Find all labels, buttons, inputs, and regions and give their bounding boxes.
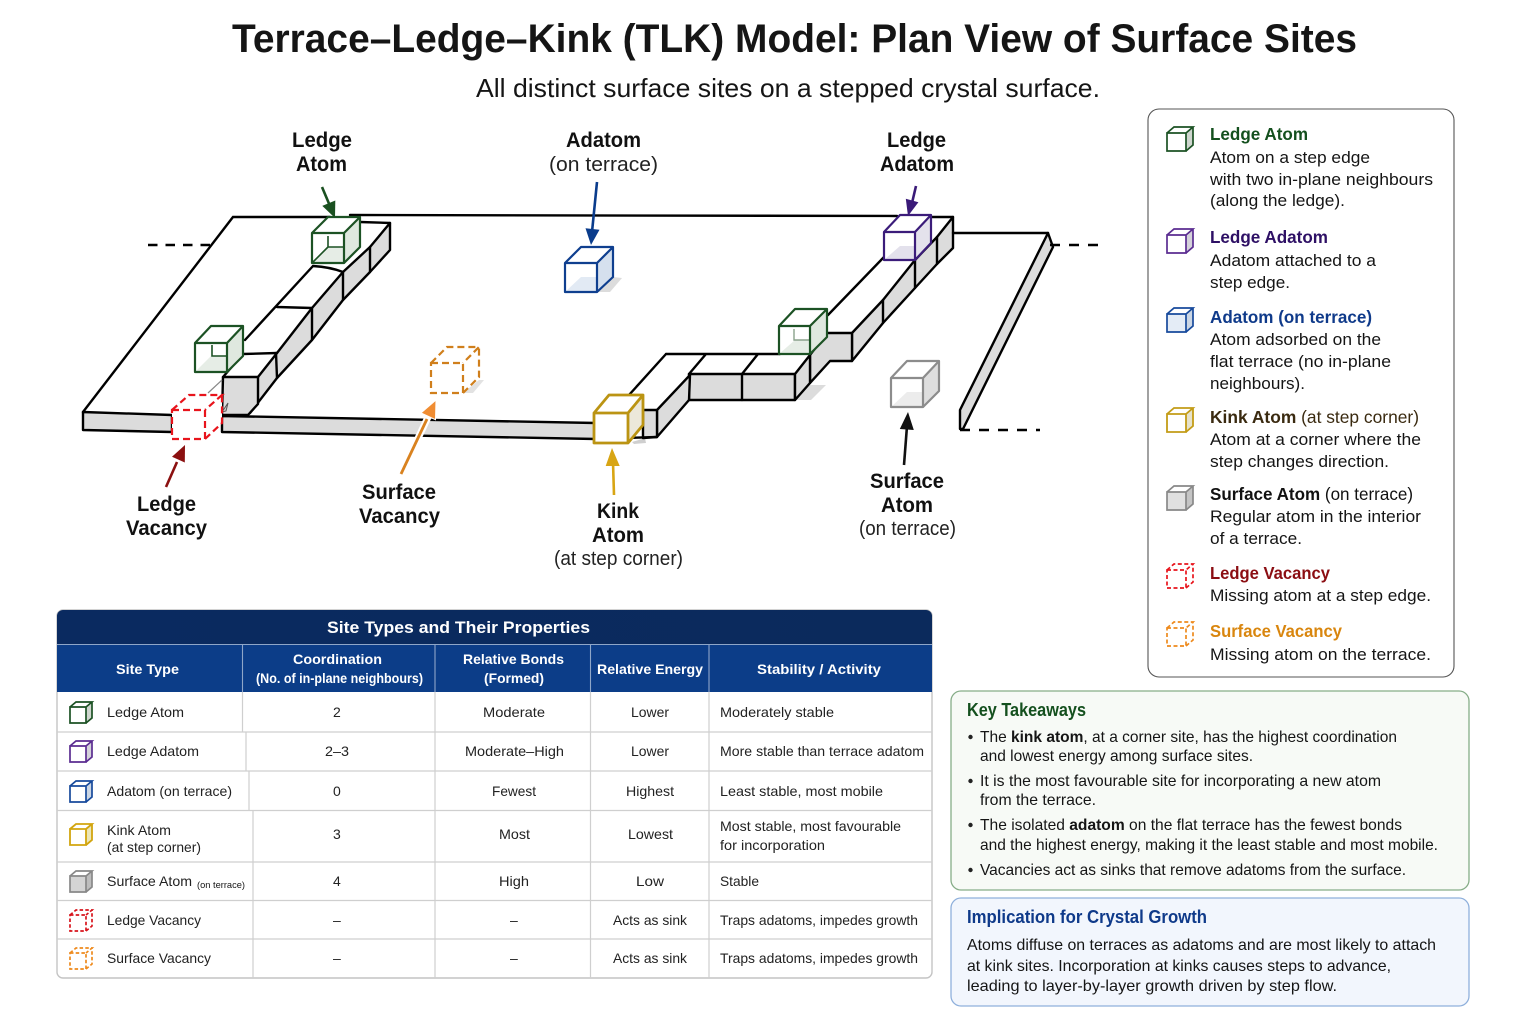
table header row: Coordination [293,651,382,667]
implication body: leading to layer-by-layer growth driven by step flow. [967,978,1337,995]
label: adatom on terrace [549,129,658,176]
implication body: Atoms diffuse on terraces as adatoms and are most likely to attach [967,937,1436,954]
implication body [967,937,1436,995]
legend: ledge vacancy [1167,563,1431,605]
arrow: adatom [586,182,600,245]
arrow: ledge adatom [906,186,918,216]
row: adatom on terrace: Least stable, most mobile [720,783,883,799]
panel: key takeaways [951,691,1469,890]
takeaway bullets: and the highest energy, making it the least stable and most mobile. [980,837,1438,854]
takeaway bullets: from the terrace. [980,792,1096,809]
panel: legend [1148,109,1454,677]
label: ledge vacancy: Vacancy [126,517,207,540]
row: kink atom [70,818,901,855]
label: ledge atom: Ledge [292,129,352,152]
row: ledge vacancy: – [333,912,341,928]
takeaway bullets: The isolated adatom on the flat terrace has the fewest bonds [980,817,1402,834]
row: surface vacancy [70,948,918,969]
label: ledge atom: Atom [296,153,347,176]
row: ledge adatom: Ledge Adatom [107,743,199,759]
takeaway bullets: Vacancies act as sinks that remove adatoms from the surface. [980,862,1406,879]
row: surface atom: Low [636,873,665,889]
table header row: Stability / Activity [757,661,881,677]
label: surface vacancy [359,481,440,528]
row: ledge vacancy: Ledge Vacancy [107,912,201,928]
table header row [57,644,932,692]
table header row: (No. of in-plane neighbours) [256,670,423,686]
row: ledge adatom [70,741,924,762]
key takeaways heading: Key Takeaways [967,700,1086,720]
legend: surface atom: of a terrace. [1210,529,1302,548]
label: kink atom: Atom [592,524,644,547]
atom: ledge atom top [312,217,360,263]
panel: implication for crystal growth [951,898,1469,1006]
implication body: at kink sites. Incorporation at kinks causes steps to advance, [967,958,1391,975]
row: ledge vacancy [70,910,918,931]
label: surface atom [859,470,956,540]
legend: kink atom: Atom at a corner where the [1210,430,1421,449]
label: adatom on terrace: (on terrace) [549,154,658,176]
legend: ledge atom [1167,124,1433,210]
label: surface atom: (on terrace) [859,518,956,540]
row: ledge atom: Moderately stable [720,704,834,720]
title: Terrace–Ledge–Kink (TLK) Model: Plan View of Surface Sites [232,17,1357,61]
legend: kink atom: Kink Atom (at step corner) [1210,407,1419,427]
legend: adatom on terrace: flat terrace (no in-plane [1210,352,1391,371]
row: adatom on terrace: Fewest [492,783,536,799]
left terrace outline and front slab [83,215,953,439]
label: kink atom [554,500,683,570]
legend: surface vacancy: Surface Vacancy [1210,621,1342,641]
row: ledge atom: 2 [333,704,341,720]
legend: adatom on terrace: Atom adsorbed on the [1210,330,1381,349]
label: kink atom: (at step corner) [554,548,683,570]
legend: ledge adatom: Ledge Adatom [1210,227,1328,247]
legend: adatom on terrace: neighbours). [1210,374,1305,393]
legend: ledge atom: Atom on a step edge [1210,148,1370,167]
row: adatom on terrace: Highest [626,783,674,799]
table: site types and their properties [57,610,932,978]
label: adatom on terrace: Adatom [566,129,641,152]
arrow: surface vacancy [401,400,436,474]
vacancy: surface vacancy [431,347,484,393]
label: surface atom: Surface [870,470,944,493]
takeaway bullets: The kink atom, at a corner site, has the highest coordination [980,729,1397,746]
row: ledge vacancy: Acts as sink [613,912,688,928]
takeaway bullets: and lowest energy among surface sites. [980,748,1253,765]
legend: surface atom: Regular atom in the interior [1210,507,1421,526]
legend: adatom on terrace: Adatom (on terrace) [1210,307,1372,327]
row: surface vacancy: Traps adatoms, impedes growth [720,950,918,966]
label: ledge vacancy [126,493,207,540]
row: ledge vacancy: Traps adatoms, impedes growth [720,912,918,928]
label: surface atom: Atom [881,494,933,517]
arrow: surface atom [900,412,914,465]
label: ledge adatom: Adatom [880,153,954,176]
implication heading: Implication for Crystal Growth [967,907,1207,927]
legend: ledge adatom: Adatom attached to a [1210,251,1377,270]
arrow: kink atom [606,448,620,495]
row: surface vacancy: – [333,950,341,966]
arrow: ledge atom [322,187,335,218]
legend: ledge atom: with two in-plane neighbours [1209,170,1433,189]
right ledge step with kink [596,217,953,444]
takeaway bullets [968,729,1438,879]
legend: surface vacancy [1167,621,1431,664]
row: ledge adatom: 2–3 [325,743,349,759]
legend: ledge atom: Ledge Atom [1210,124,1308,144]
row: ledge atom [70,702,834,723]
row: ledge atom: Lower [631,704,669,720]
legend: ledge atom: (along the ledge). [1210,191,1345,210]
table title bar: Site Types and Their Properties [327,618,590,637]
label: ledge vacancy: Ledge [137,493,196,516]
right terrace slab [953,233,1106,430]
label: surface vacancy: Vacancy [359,505,440,528]
row: surface atom: High [499,873,529,889]
row: kink atom: for incorporation [720,837,825,853]
vacancy: ledge vacancy [172,395,222,439]
table header row: Site Type [116,661,179,677]
row: ledge vacancy: – [510,912,518,928]
row: ledge atom: Ledge Atom [107,704,184,720]
row: ledge atom: Moderate [483,704,545,720]
atom: surface atom [891,361,939,407]
label: ledge atom [292,129,352,176]
label: ledge adatom [880,129,954,176]
row: ledge adatom: Lower [631,743,669,759]
left ledge step [208,222,390,415]
row: surface vacancy: Surface Vacancy [107,950,211,966]
legend: kink atom [1167,407,1421,471]
label: surface vacancy: Surface [362,481,436,504]
row: surface vacancy: – [510,950,518,966]
legend: ledge adatom [1167,227,1377,292]
legend: ledge adatom: step edge. [1210,273,1290,292]
arrow: ledge vacancy [166,445,185,487]
legend: ledge vacancy: Ledge Vacancy [1210,563,1330,583]
diagram: stepped crystal surface [83,215,1106,444]
legend: ledge vacancy: Missing atom at a step edge. [1210,586,1431,605]
row: kink atom: Most stable, most favourable [720,818,901,834]
row: adatom on terrace: Adatom (on terrace) [107,783,232,799]
row: adatom on terrace [70,781,883,802]
row: kink atom: Lowest [628,826,673,842]
row: adatom on terrace: 0 [333,783,341,799]
legend: kink atom: step changes direction. [1210,452,1389,471]
row: kink atom: Most [499,826,530,842]
row: ledge adatom: More stable than terrace adatom [720,743,924,759]
table header row: (Formed) [484,670,544,686]
atom: adatom on terrace [565,247,622,292]
row: kink atom: (at step corner) [107,839,201,855]
atom: ledge adatom [884,215,931,260]
takeaway bullets: It is the most favourable site for incorporating a new atom [980,773,1381,790]
legend: adatom on terrace [1167,307,1391,393]
subtitle: All distinct surface sites on a stepped crystal surface. [476,73,1100,103]
table title bar [57,610,932,644]
legend: surface vacancy: Missing atom on the terrace. [1210,645,1431,664]
row: kink atom: 3 [333,826,341,842]
row: kink atom: Kink Atom [107,822,171,838]
row: surface vacancy: Acts as sink [613,950,688,966]
atom: ledge atom lower [195,326,243,372]
row: surface atom: 4 [333,873,341,889]
table header row: Relative Bonds [463,651,564,667]
legend: surface atom [1167,484,1421,548]
atom: ledge atom right [779,309,827,354]
row: surface atom: (on terrace) [197,880,245,891]
row: surface atom: Surface Atom [107,873,192,889]
table header row: Relative Energy [597,661,703,677]
atom: kink atom [594,395,643,443]
label: ledge adatom: Ledge [887,129,946,152]
row: surface atom: Stable [720,873,759,889]
row: surface atom [70,871,759,892]
row: ledge adatom: Moderate–High [465,743,564,759]
legend: surface atom: Surface Atom (on terrace) [1210,484,1413,504]
label: kink atom: Kink [597,500,639,523]
